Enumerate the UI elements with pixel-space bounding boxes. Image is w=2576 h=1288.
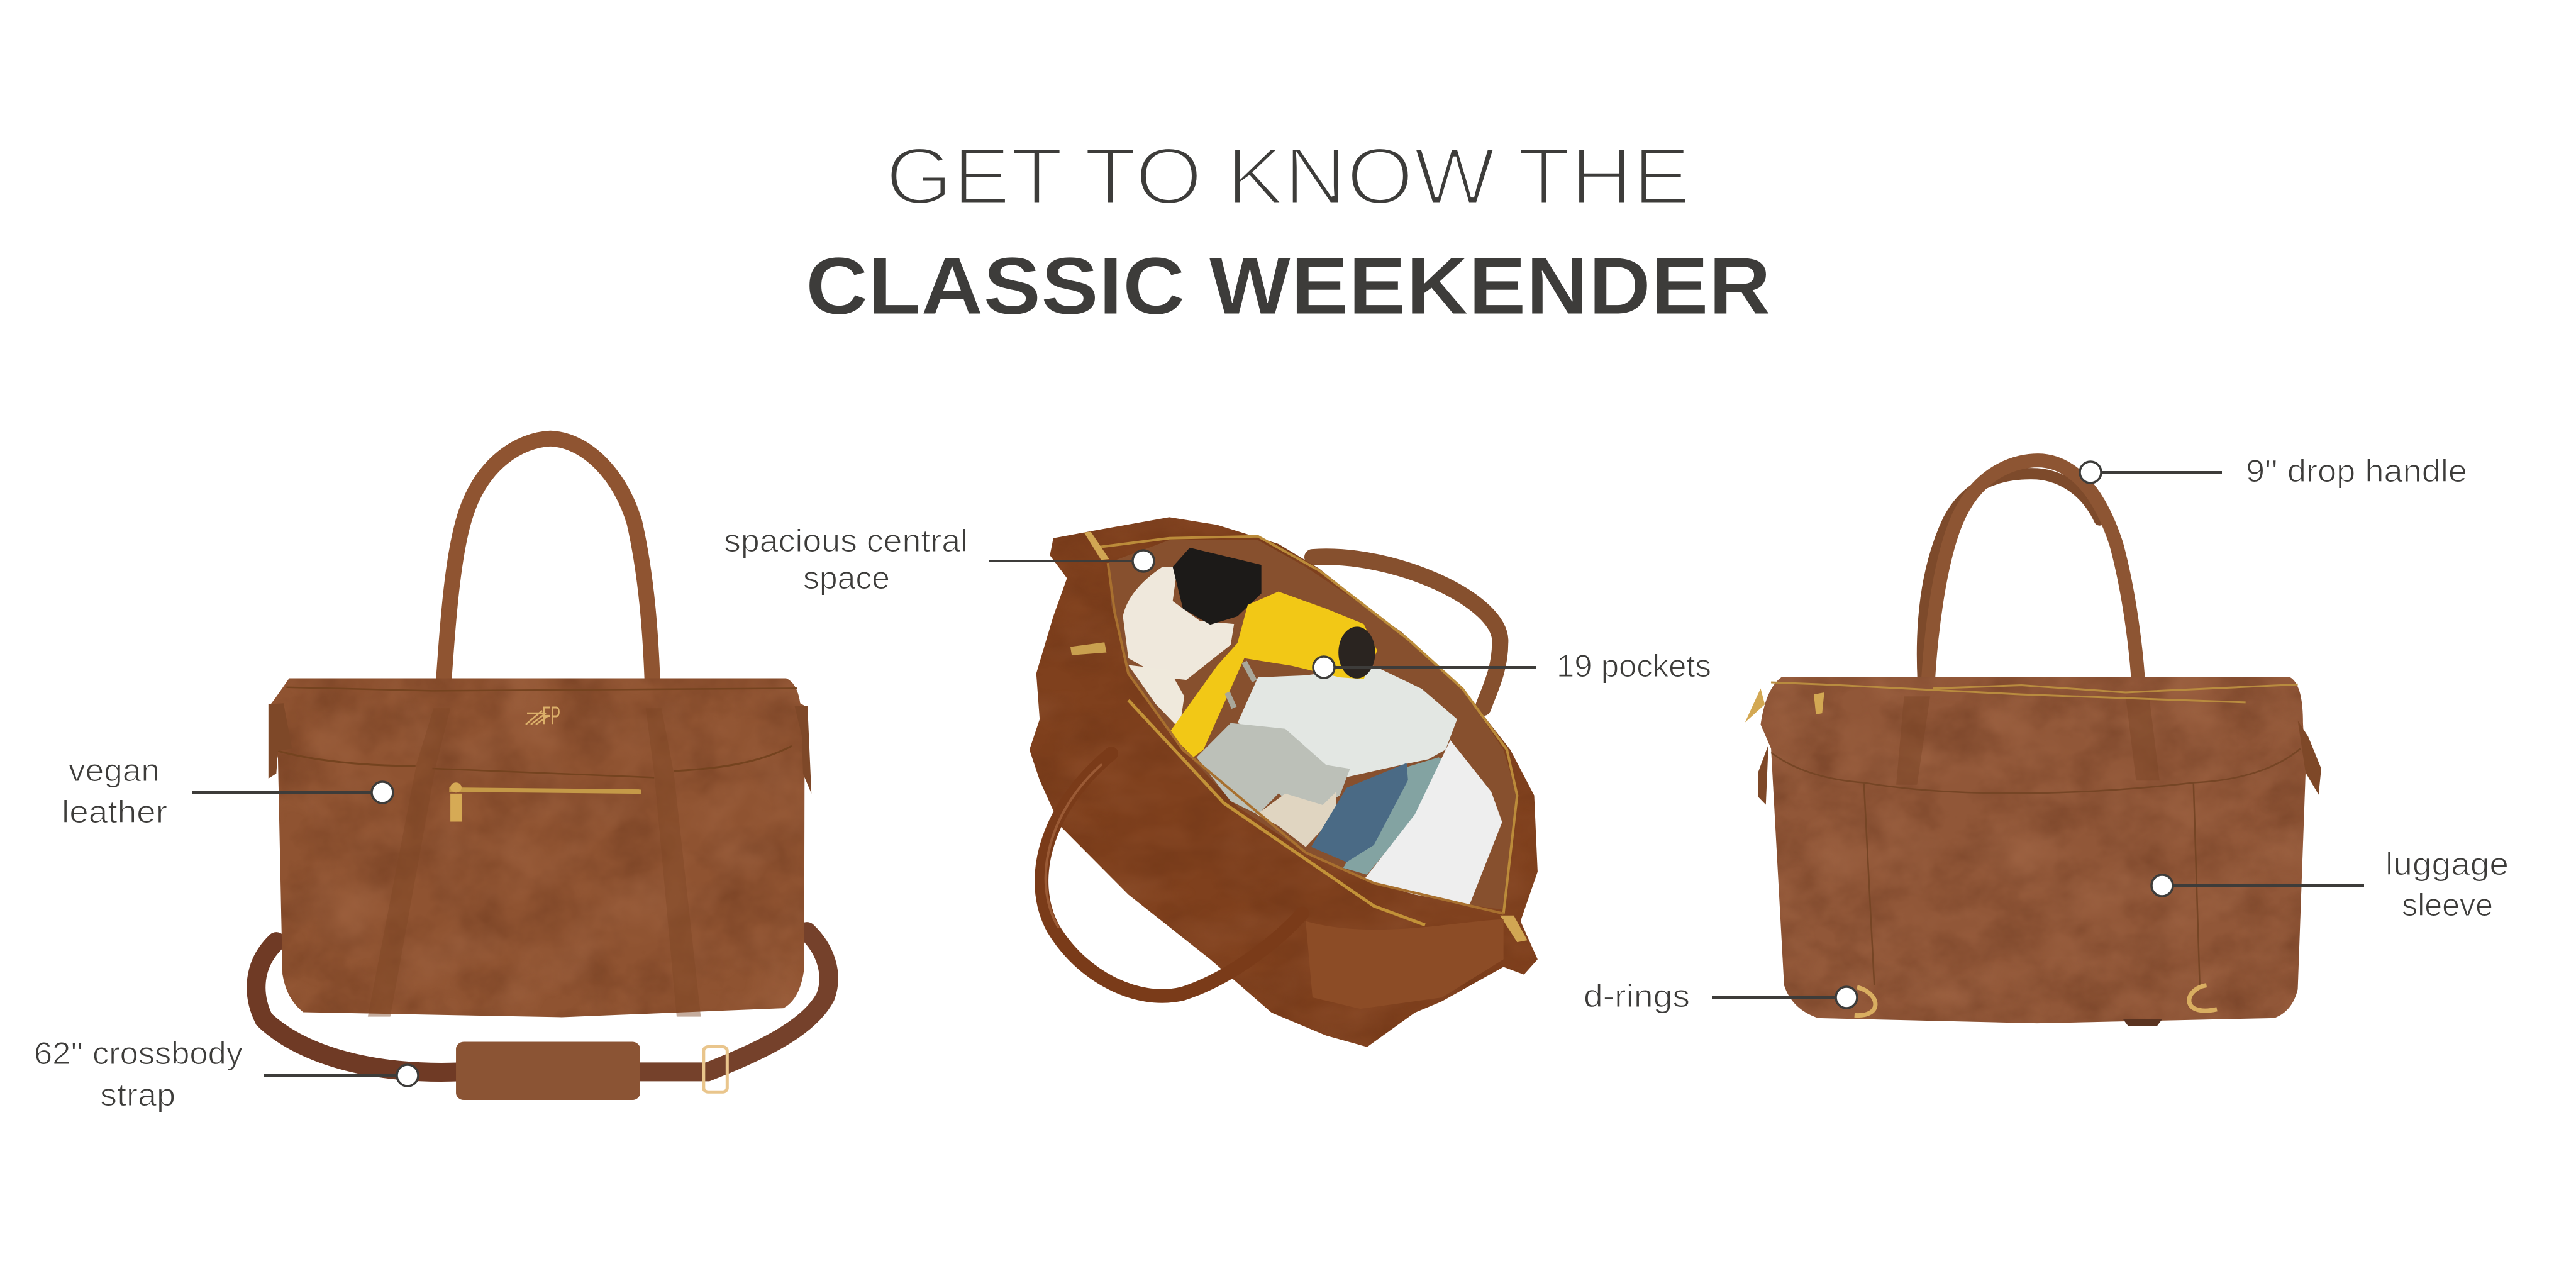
callout: luggage sleeve — [2151, 847, 2509, 923]
callout: drop handle: 9'' drop handle — [2246, 453, 2467, 489]
callout: vegan leather: vegan — [69, 753, 160, 788]
teal towel — [1343, 757, 1450, 875]
crossbody strap — [256, 931, 829, 1100]
callout: spacious central space: space — [803, 560, 890, 596]
grey muslin — [1197, 723, 1350, 814]
luggage sleeve — [1771, 748, 2301, 985]
white pad — [1363, 740, 1502, 905]
callout: luggage sleeve: luggage — [2385, 847, 2509, 882]
front zipper pocket — [449, 782, 641, 821]
callout: crossbody strap: 62'' crossbody — [34, 1036, 243, 1071]
center bag: open view — [1019, 513, 1552, 1051]
diapers — [1238, 666, 1457, 777]
blue towel — [1311, 763, 1408, 862]
title — [806, 131, 1771, 331]
d-ring left — [1855, 987, 1875, 1016]
callout: vegan leather — [62, 753, 393, 830]
bottom tab — [2123, 1019, 2162, 1026]
callout: vegan leather: leather — [62, 794, 167, 830]
bag shell — [1019, 513, 1552, 1051]
side tabs — [269, 703, 811, 794]
front handle — [1928, 460, 2139, 692]
zipper pulls — [1745, 689, 1824, 723]
callout: spacious central space — [724, 523, 1154, 596]
callout: 19 pockets: 19 pockets — [1557, 648, 1711, 684]
top handle — [443, 438, 653, 703]
logo mark: FP — [542, 702, 560, 730]
title line: classic weekender: CLASSIC WEEKENDER — [806, 241, 1771, 331]
callout: luggage sleeve: sleeve — [2402, 887, 2493, 923]
back handle — [1313, 557, 1500, 708]
left bag: front view — [256, 438, 829, 1100]
bag body — [1755, 672, 2313, 1025]
rear handle — [1923, 474, 2099, 684]
callout: 19 pockets — [1313, 648, 1711, 684]
side tabs — [1758, 721, 2321, 805]
bag body — [264, 673, 814, 1024]
black bottle cap — [1173, 548, 1262, 625]
logo mark — [526, 702, 560, 730]
top zippers — [1771, 682, 2298, 702]
front handle — [1041, 753, 1302, 996]
callout: d-rings: d-rings — [1584, 979, 1690, 1014]
front fold highlight — [1306, 919, 1504, 1009]
zippers — [1070, 531, 1528, 942]
callout: spacious central space: spacious central — [724, 523, 968, 558]
title line: get to know the: GET TO KNOW THE — [886, 131, 1690, 221]
callout: drop handle — [2080, 453, 2467, 489]
callout: crossbody strap — [34, 1036, 418, 1113]
interior lining — [1108, 540, 1517, 910]
callout: crossbody strap: strap — [100, 1077, 175, 1113]
white cloth — [1128, 665, 1184, 729]
d-ring right — [2189, 985, 2217, 1011]
cream bottle — [1123, 567, 1234, 680]
beige cloth — [1257, 792, 1336, 847]
callout: d-rings — [1584, 979, 1857, 1014]
yellow hair dryer — [1169, 592, 1377, 757]
right bag: back view — [1745, 460, 2321, 1026]
